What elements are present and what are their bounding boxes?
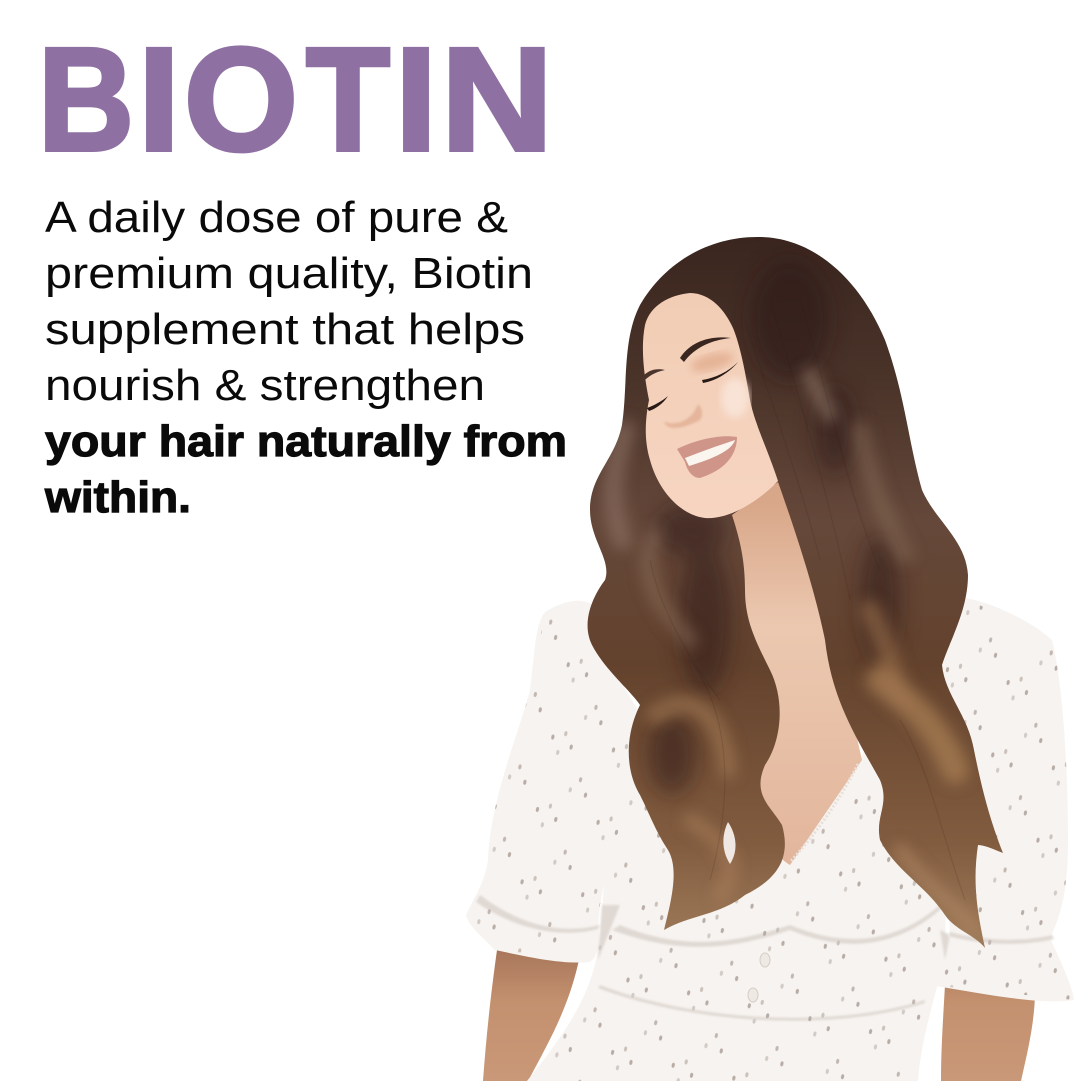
neckline lace bbox=[790, 764, 858, 862]
dress shading bbox=[476, 895, 1054, 1021]
description text block: nourish & strengthen bbox=[45, 361, 485, 410]
description text block: A daily dose of pure & bbox=[45, 193, 508, 242]
description text block: within. bbox=[44, 473, 191, 522]
title: N bbox=[441, 18, 553, 182]
hair bbox=[588, 237, 1003, 948]
description text block: your hair naturally from bbox=[45, 417, 567, 466]
title: I bbox=[138, 18, 180, 182]
hair strands bbox=[650, 512, 966, 900]
nose bbox=[664, 404, 702, 428]
teeth bbox=[685, 440, 735, 466]
neck and chest skin bbox=[700, 450, 862, 865]
eyeshadow bbox=[689, 349, 735, 375]
description text block: supplement that helps bbox=[45, 305, 525, 354]
description text block: premium quality, Biotin bbox=[45, 249, 533, 298]
left sleeve bbox=[466, 601, 625, 963]
title: I bbox=[395, 18, 437, 182]
face skin bbox=[643, 293, 778, 518]
hair shading and highlights bbox=[613, 260, 975, 930]
eyelet embroidery bbox=[466, 598, 1074, 1081]
hair mass bbox=[588, 237, 1003, 948]
face bbox=[640, 293, 778, 518]
right closed eye bbox=[702, 362, 738, 383]
dress buttons bbox=[748, 953, 770, 1002]
title: B bbox=[38, 18, 134, 182]
left eyebrow bbox=[680, 337, 731, 362]
white dress bbox=[466, 598, 1074, 1081]
lips bbox=[677, 436, 737, 478]
title: T bbox=[306, 18, 390, 182]
left closed eye bbox=[647, 396, 668, 411]
right forearm bbox=[941, 985, 1035, 1081]
right sleeve bbox=[930, 598, 1074, 1001]
cheek glow bbox=[721, 378, 749, 418]
description text block bbox=[44, 193, 567, 522]
right eyebrow bbox=[640, 369, 665, 384]
dress torso bbox=[527, 640, 950, 1081]
title bbox=[38, 18, 553, 182]
title: O bbox=[184, 18, 298, 182]
left forearm bbox=[483, 950, 580, 1081]
dress showing through hair curl bbox=[723, 822, 736, 864]
woman portrait illustration bbox=[466, 237, 1074, 1081]
